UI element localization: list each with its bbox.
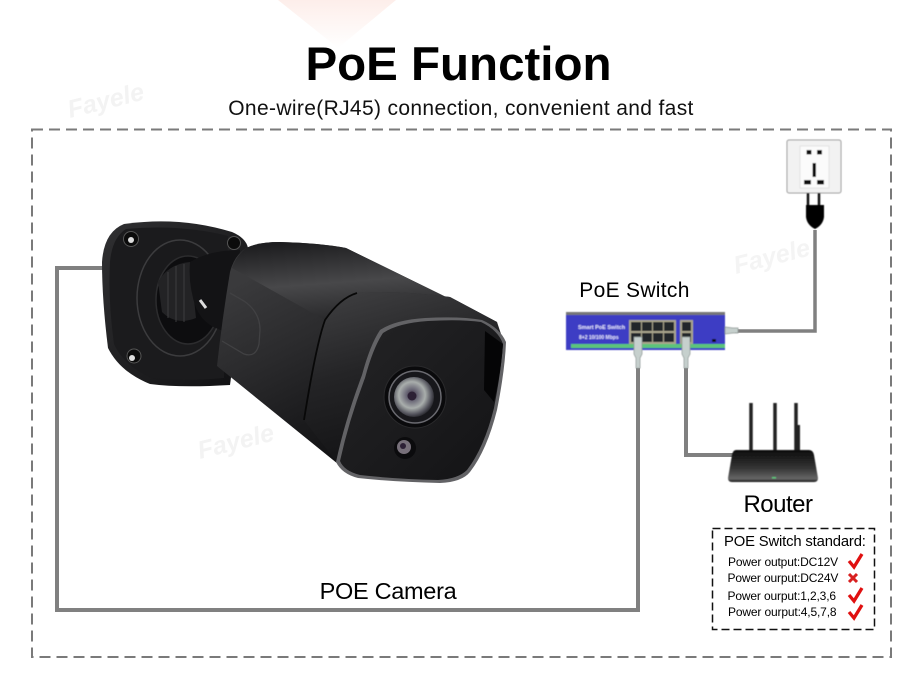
camera side shadow: [484, 331, 503, 402]
label: PoE Switch: PoE Switch: [579, 279, 690, 302]
title: PoE Function: [305, 38, 612, 91]
plug prongs: [808, 193, 819, 206]
camera side panel: [222, 293, 260, 355]
switch power socket: [712, 339, 716, 342]
socket plate: [787, 140, 841, 193]
panel: POE switch standard: [712, 528, 874, 630]
label: Router: Router: [743, 491, 813, 518]
switch ports block: [629, 320, 676, 344]
camera front bezel: [336, 317, 506, 483]
wire: camera to PoE switch: [57, 268, 638, 610]
icon: PoE switch: [566, 312, 738, 368]
label: POE Camera: POE Camera: [320, 578, 458, 604]
camera mount ring: [137, 240, 223, 356]
wire: switch to router: [686, 368, 736, 455]
icon: PoE switch: 8+2 10/100 Mbps: [579, 335, 619, 341]
switch green strip: [571, 344, 725, 348]
camera mount plate inner face: [110, 228, 228, 380]
camera body: [217, 242, 500, 470]
camera IR sensor: [394, 437, 416, 459]
plug body: [806, 205, 824, 229]
watermark: Fayele centre: Fayele: [195, 419, 277, 465]
camera barrel: [158, 262, 196, 321]
row: DC12V: Power output:DC12V: [728, 555, 838, 569]
wire: switch to power socket: [735, 230, 815, 331]
camera front collar: [304, 292, 503, 470]
panel heading: POE Switch standard:: [724, 534, 866, 550]
switch panel text: Smart PoE Switch: [578, 325, 626, 331]
router status led: [772, 477, 776, 478]
subtitle: One-wire(RJ45) connection, convenient and fast: [228, 97, 694, 120]
router body: [728, 450, 818, 482]
camera arm: [190, 250, 240, 332]
row: 4,5,7,8: Power ourput:4,5,7,8: [728, 605, 837, 619]
icon: POE camera: [102, 221, 506, 483]
decorative faint pink triangle at top: [278, 0, 396, 48]
RJ45 plug: router cable: [682, 337, 690, 368]
switch uplink ports: [680, 320, 693, 344]
camera mount plate: [102, 221, 248, 386]
camera top highlight: [232, 242, 497, 322]
switch front panel: [566, 315, 725, 350]
icon: wall socket and plug: [787, 140, 841, 229]
switch top edge: [566, 312, 725, 315]
socket holes: [804, 150, 824, 184]
router antennas: [751, 403, 796, 451]
RJ45 plug: camera cable: [634, 337, 642, 368]
dashed diagram frame: [32, 130, 891, 657]
camera lens: [384, 366, 446, 428]
row: 1,2,3,6: Power ourput:1,2,3,6: [728, 589, 836, 603]
watermark: Fayele top left: Fayele: [65, 78, 147, 124]
camera seam: [304, 293, 357, 420]
row: DC24V: Power ourput:DC24V: [728, 571, 838, 585]
RJ45 plug: power cable: [725, 327, 738, 334]
camera front face: [340, 320, 503, 480]
panel dashed border: [712, 528, 874, 630]
watermark: Fayele right: Fayele: [731, 234, 813, 280]
icon: router: [728, 403, 818, 482]
